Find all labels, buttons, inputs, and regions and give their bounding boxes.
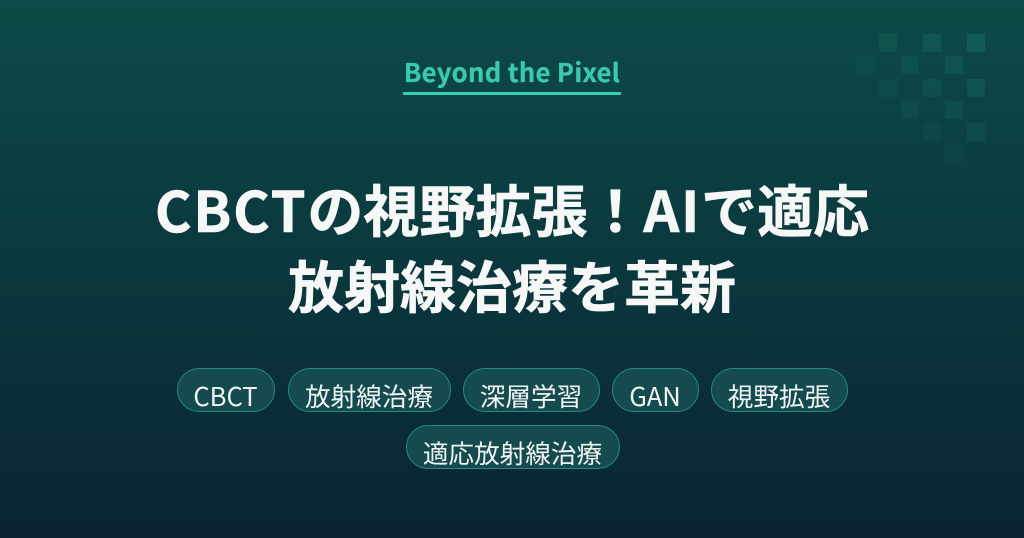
decorative pixel grid [879, 34, 985, 141]
brand label: Beyond the Pixel: Beyond the Pixel [404, 53, 620, 90]
tag: GAN [612, 368, 699, 412]
tag: 放射線治療 [288, 368, 451, 412]
tag: 視野拡張 [711, 368, 848, 412]
tag: 深層学習 [463, 368, 600, 412]
title: 放射線治療を革新 [288, 244, 736, 325]
tag: CBCT [177, 368, 275, 412]
title [155, 168, 869, 325]
tag: 適応放射線治療 [406, 425, 620, 469]
title: CBCTの視野拡張！AIで適応 [155, 168, 869, 249]
tags [177, 368, 848, 469]
